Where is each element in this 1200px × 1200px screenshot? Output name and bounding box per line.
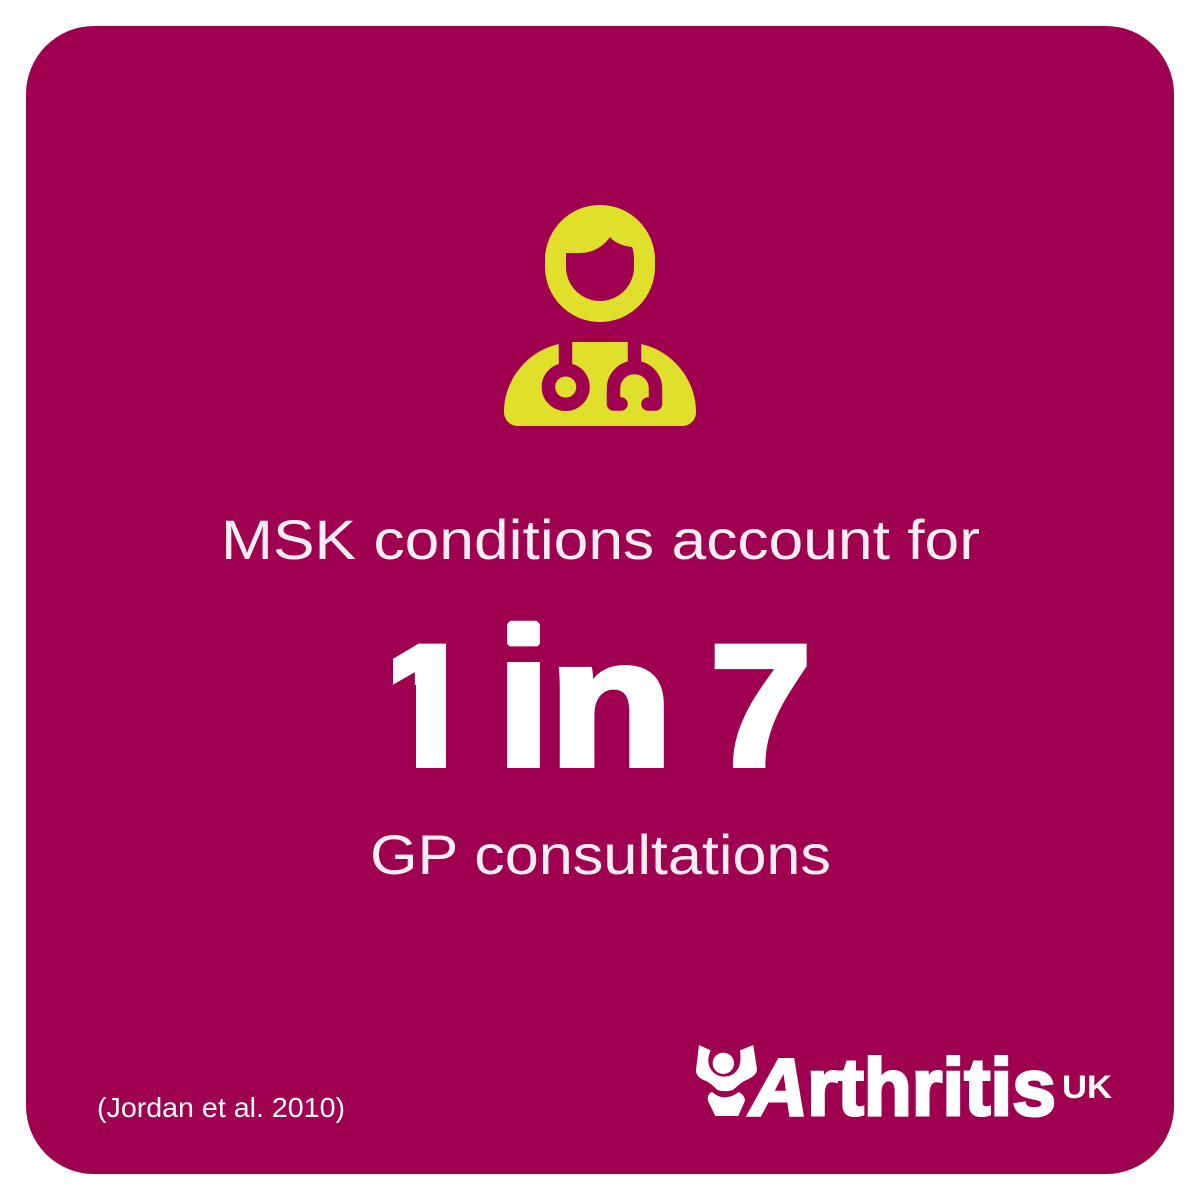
text: headline statistic: i	[496, 589, 551, 807]
text: headline statistic	[393, 620, 807, 768]
text: citation: (Jordan et al. 2010)	[97, 1092, 345, 1123]
text: headline statistic: 1	[374, 610, 478, 802]
text: headline statistic: n	[549, 603, 673, 804]
logo UK suffix: UK	[1062, 1069, 1112, 1105]
text: headline statistic: 7	[710, 610, 812, 802]
text: lead-in line: MSK conditions account for	[221, 508, 980, 571]
icon: doctor head	[545, 205, 655, 322]
icon: doctor body	[504, 338, 696, 426]
logo wordmark: A	[748, 1043, 808, 1133]
icon: logo figure with raised arms	[696, 1045, 757, 1116]
text: GP consultations line: GP consultations	[370, 823, 831, 886]
icon: doctor with stethoscope	[504, 205, 696, 426]
logo wordmark: rthritis	[807, 1043, 1056, 1133]
logo: Arthritis UK	[696, 1043, 1112, 1133]
